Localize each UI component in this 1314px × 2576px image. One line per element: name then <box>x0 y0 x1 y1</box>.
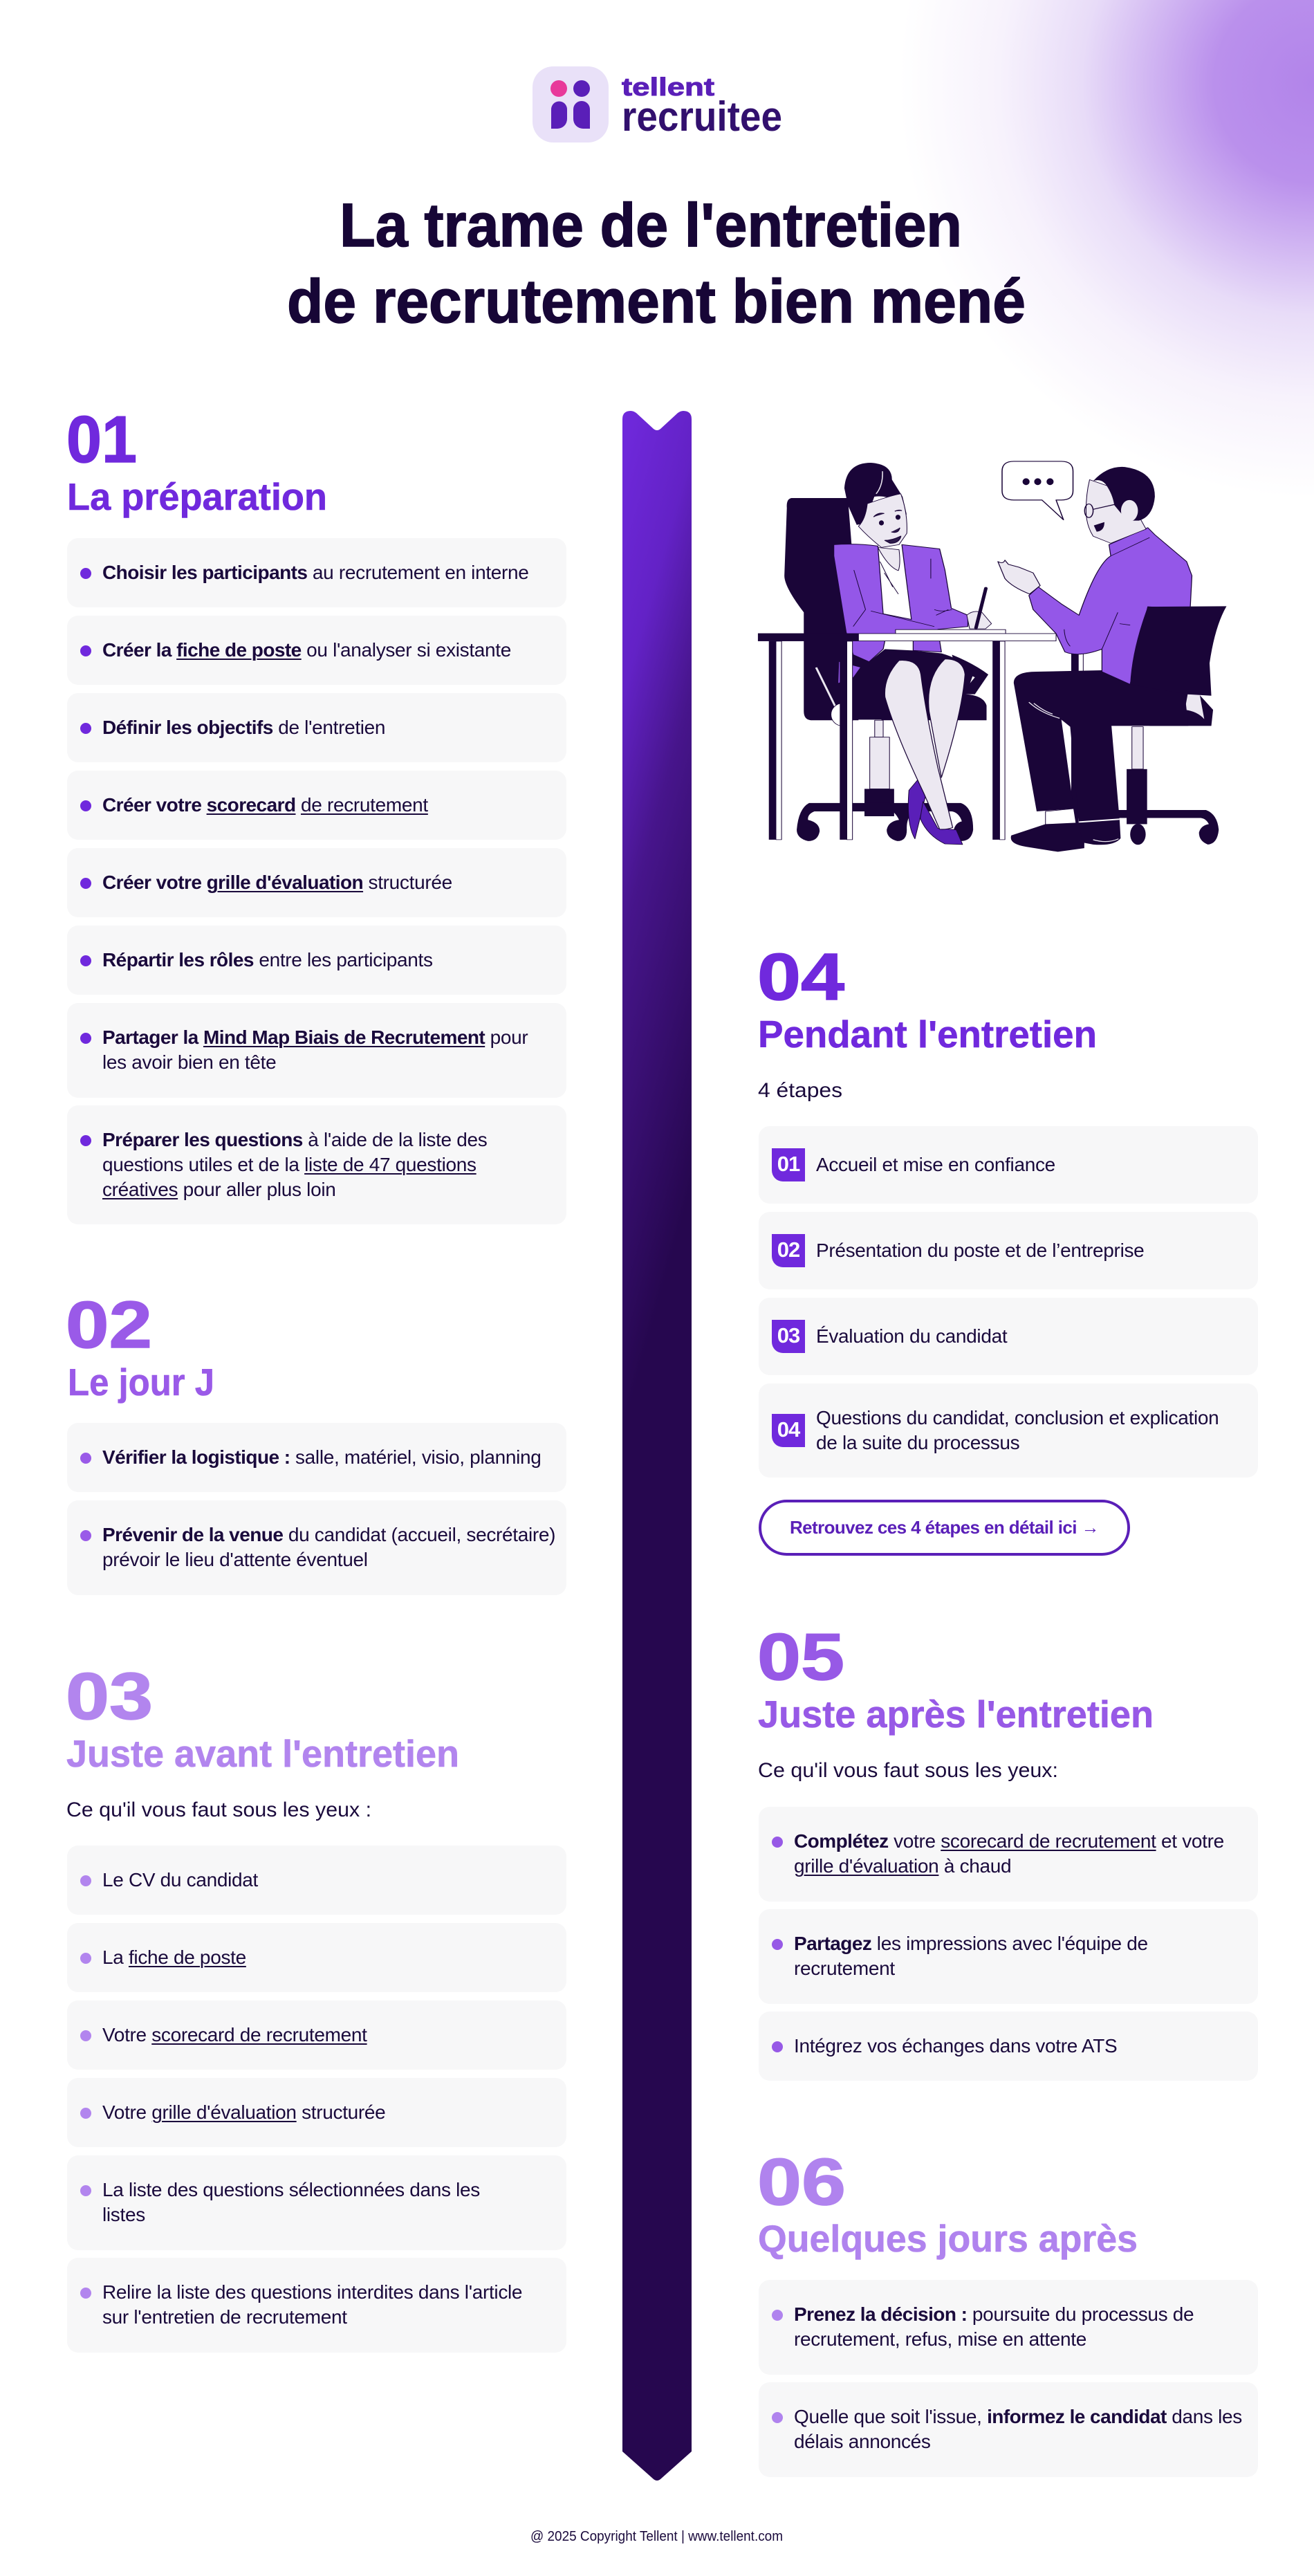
panel: 05 juste après l'entretien <box>757 1620 1224 2057</box>
item: Créer votre scorecard de recrutement <box>102 794 428 816</box>
heading: 04: 04 <box>757 940 844 1014</box>
heading: 03 <box>66 1659 459 1821</box>
step 03 <box>759 1298 1258 1375</box>
table legs <box>769 641 1083 840</box>
timeline arrow <box>622 411 692 2481</box>
item <box>67 693 566 762</box>
woman's front leg <box>885 661 953 829</box>
item: Prévenir de la venue du candidat (accueil, secrétaire) <box>102 1524 555 1545</box>
item <box>67 1500 566 1595</box>
item: Quelle que soit l'issue, informez le candidat dans les <box>794 2406 1242 2427</box>
logo: tellent recruitee <box>533 66 782 142</box>
step 04 <box>759 1383 1258 1478</box>
panel: 03 juste avant l'entretien <box>66 1659 522 2328</box>
woman's chair <box>784 498 988 841</box>
item <box>67 771 566 840</box>
item: délais annoncés <box>794 2431 931 2452</box>
heading: 04 <box>757 940 1097 1102</box>
step 01 <box>759 1126 1258 1204</box>
step 02: Présentation du poste et de l’entreprise <box>816 1240 1144 1261</box>
heading: 02 <box>66 1288 214 1404</box>
heading: 05: 05 <box>757 1620 844 1694</box>
item <box>67 538 566 607</box>
item: prévoir le lieu d'attente éventuel <box>102 1549 368 1570</box>
heading: 01: La préparation <box>67 475 327 518</box>
item <box>67 1423 566 1492</box>
item <box>67 926 566 995</box>
panel: 01 la préparation <box>66 403 529 1200</box>
logo: tellent recruitee: tellent <box>622 73 714 101</box>
heading: 04: 4 étapes <box>758 1079 842 1102</box>
step 01: Accueil et mise en confiance <box>816 1154 1055 1175</box>
item: Le CV du candidat <box>102 1869 258 1890</box>
item <box>759 1909 1258 2004</box>
item <box>67 1003 566 1098</box>
heading: 02: 02 <box>66 1288 152 1362</box>
woman's shoes <box>908 779 925 839</box>
item: Choisir les participants au recrutement en interne <box>102 562 529 583</box>
woman's head <box>844 463 907 525</box>
heading: 06: 06 <box>757 2145 846 2219</box>
item: La fiche de poste <box>102 1947 246 1968</box>
item: listes <box>102 2204 145 2225</box>
illustration: interview scene <box>758 461 1227 852</box>
item: Partagez les impressions avec l'équipe de <box>794 1933 1148 1954</box>
step 01: 01 <box>777 1152 799 1176</box>
item <box>67 1846 566 1915</box>
item <box>759 2012 1258 2081</box>
item: recrutement, refus, mise en attente <box>794 2328 1086 2350</box>
item: Votre scorecard de recrutement <box>102 2024 367 2045</box>
woman's shirt <box>878 547 912 621</box>
heading: 03: Ce qu'il vous faut sous les yeux : <box>66 1798 371 1821</box>
heading: 02: Le jour J <box>68 1361 214 1404</box>
button: Retrouvez ces 4 étapes en détail ici → <box>790 1517 1099 1538</box>
step 04: de la suite du processus <box>816 1432 1019 1453</box>
background gradient blob <box>864 0 1314 526</box>
item: Votre grille d'évaluation structurée <box>102 2101 385 2123</box>
item: sur l'entretien de recrutement <box>102 2306 347 2328</box>
logo: tellent recruitee: recruitee <box>622 93 782 140</box>
heading: 03: 03 <box>66 1659 153 1733</box>
man's back of chair <box>1130 606 1226 696</box>
heading: 05: Juste après l'entretien <box>758 1693 1154 1736</box>
heading: 06: Quelques jours après <box>758 2217 1138 2260</box>
item <box>759 2280 1258 2375</box>
step 03: 03 <box>777 1323 799 1347</box>
heading: 06 <box>757 2145 1138 2260</box>
item <box>67 616 566 685</box>
item <box>67 2258 566 2353</box>
step 04: Questions du candidat, conclusion et explication <box>816 1407 1219 1428</box>
heading: 05: Ce qu'il vous faut sous les yeux: <box>758 1759 1058 1782</box>
item: Répartir les rôles entre les participants <box>102 949 433 970</box>
title: La trame de l'entretien <box>340 190 962 259</box>
speech bubble <box>1002 461 1073 519</box>
heading: 04: Pendant l'entretien <box>758 1013 1097 1056</box>
item: Vérifier la logistique : salle, matériel, visio, planning <box>102 1446 541 1468</box>
table top <box>896 629 1006 634</box>
panel: 06 quelques jours après <box>757 2145 1242 2452</box>
panel: 02 le jour J <box>66 1288 555 1570</box>
item: grille d'évaluation à chaud <box>794 1855 1011 1877</box>
woman's skirt <box>846 649 973 719</box>
heading: 01 <box>66 403 327 518</box>
item <box>67 1105 566 1224</box>
item: Partager la Mind Map Biais de Recrutement pour <box>102 1027 528 1048</box>
item <box>67 848 566 917</box>
item: Relire la liste des questions interdites dans l'article <box>102 2281 522 2303</box>
step 04: 04 <box>777 1417 799 1442</box>
item: Intégrez vos échanges dans votre ATS <box>794 2035 1117 2057</box>
button <box>759 1500 1130 1556</box>
woman's jacket <box>834 544 968 662</box>
item: Complétez votre scorecard de recrutement et votre <box>794 1830 1224 1852</box>
man's chair <box>1079 683 1219 845</box>
step 02: 02 <box>777 1238 799 1262</box>
title <box>287 190 1026 335</box>
title: de recrutement bien mené <box>287 266 1026 335</box>
item: Créer la fiche de poste ou l'analyser si existante <box>102 639 511 661</box>
item: Prenez la décision : poursuite du processus de <box>794 2303 1194 2325</box>
man's torso <box>1029 528 1192 684</box>
item: La liste des questions sélectionnées dans les <box>102 2179 480 2200</box>
heading: 03: Juste avant l'entretien <box>66 1732 459 1775</box>
item <box>67 1923 566 1992</box>
item <box>67 2078 566 2147</box>
heading: 01: 01 <box>66 403 137 477</box>
item: Préparer les questions à l'aide de la liste des <box>102 1129 487 1150</box>
man's head <box>1086 479 1146 543</box>
step 03: Évaluation du candidat <box>816 1325 1007 1347</box>
heading: 05 <box>757 1620 1154 1782</box>
item: recrutement <box>794 1958 895 1979</box>
item <box>67 2000 566 2070</box>
item: questions utiles et de la liste de 47 questions <box>102 1154 476 1175</box>
step 02 <box>759 1212 1258 1289</box>
item <box>759 2382 1258 2477</box>
man's hand <box>998 560 1040 594</box>
item: créatives pour aller plus loin <box>102 1179 335 1200</box>
item <box>759 1807 1258 1902</box>
item <box>67 2155 566 2250</box>
front table legs <box>840 641 846 840</box>
item: Définir les objectifs de l'entretien <box>102 717 385 738</box>
item: les avoir bien en tête <box>102 1051 276 1073</box>
panel: 04 pendant l'entretien <box>757 940 1219 1556</box>
woman's hand and pen <box>967 611 992 629</box>
man's trousers <box>1014 670 1188 822</box>
woman's back leg <box>929 659 965 778</box>
item: Créer votre grille d'évaluation structurée <box>102 872 452 893</box>
man's shoes <box>1011 822 1084 852</box>
